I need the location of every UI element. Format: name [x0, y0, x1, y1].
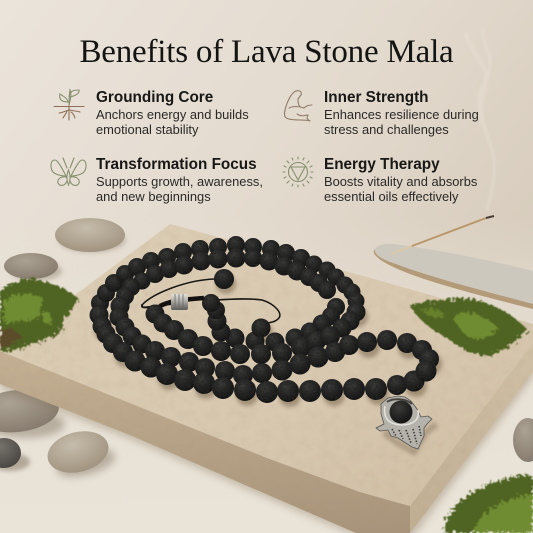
- heading: Energy Therapy: [324, 156, 440, 173]
- icon: plant with roots: [54, 90, 84, 120]
- lava stone mala: [90, 236, 442, 407]
- moss: right: [410, 298, 528, 356]
- stone: left dark: [0, 438, 30, 471]
- icon: radiant energy triangle: [283, 157, 313, 187]
- smoke wisps: [466, 30, 494, 210]
- incense stick: [391, 216, 494, 254]
- description: emotional stability: [96, 122, 199, 137]
- moss: bottom right: [444, 476, 533, 533]
- bead shadows: [94, 274, 442, 407]
- description: Boosts vitality and absorbs: [324, 174, 477, 189]
- benefit: Transformation Focus: [51, 156, 263, 204]
- leather cords: [142, 279, 280, 323]
- description: essential oils effectively: [324, 189, 459, 204]
- stone: left mid: [0, 386, 65, 438]
- icon: flexed arm: [284, 91, 312, 121]
- benefit: Energy Therapy: [283, 156, 477, 204]
- benefit: Inner Strength: [284, 89, 479, 137]
- description: stress and challenges: [324, 122, 449, 137]
- stone: back small: [4, 253, 62, 281]
- heading: Transformation Focus: [96, 156, 257, 173]
- benefit: Grounding Core: [54, 89, 249, 137]
- beads: [90, 236, 439, 403]
- hamsa pendant: [376, 396, 436, 452]
- description: Enhances resilience during: [324, 107, 479, 122]
- slab: [0, 224, 533, 533]
- description: Supports growth, awareness,: [96, 174, 263, 189]
- moss: left: [0, 278, 80, 352]
- heading: Inner Strength: [324, 89, 429, 106]
- description: and new beginnings: [96, 189, 211, 204]
- incense holder: [374, 216, 533, 309]
- stone: back large: [55, 218, 126, 253]
- stone: right edge: [513, 418, 533, 462]
- icon: butterfly: [51, 158, 86, 185]
- silver clasp: [160, 294, 204, 310]
- heading: Grounding Core: [96, 89, 213, 106]
- stone: front: [43, 425, 118, 482]
- description: Anchors energy and builds: [96, 107, 249, 122]
- title: Benefits of Lava Stone Mala: [80, 34, 454, 70]
